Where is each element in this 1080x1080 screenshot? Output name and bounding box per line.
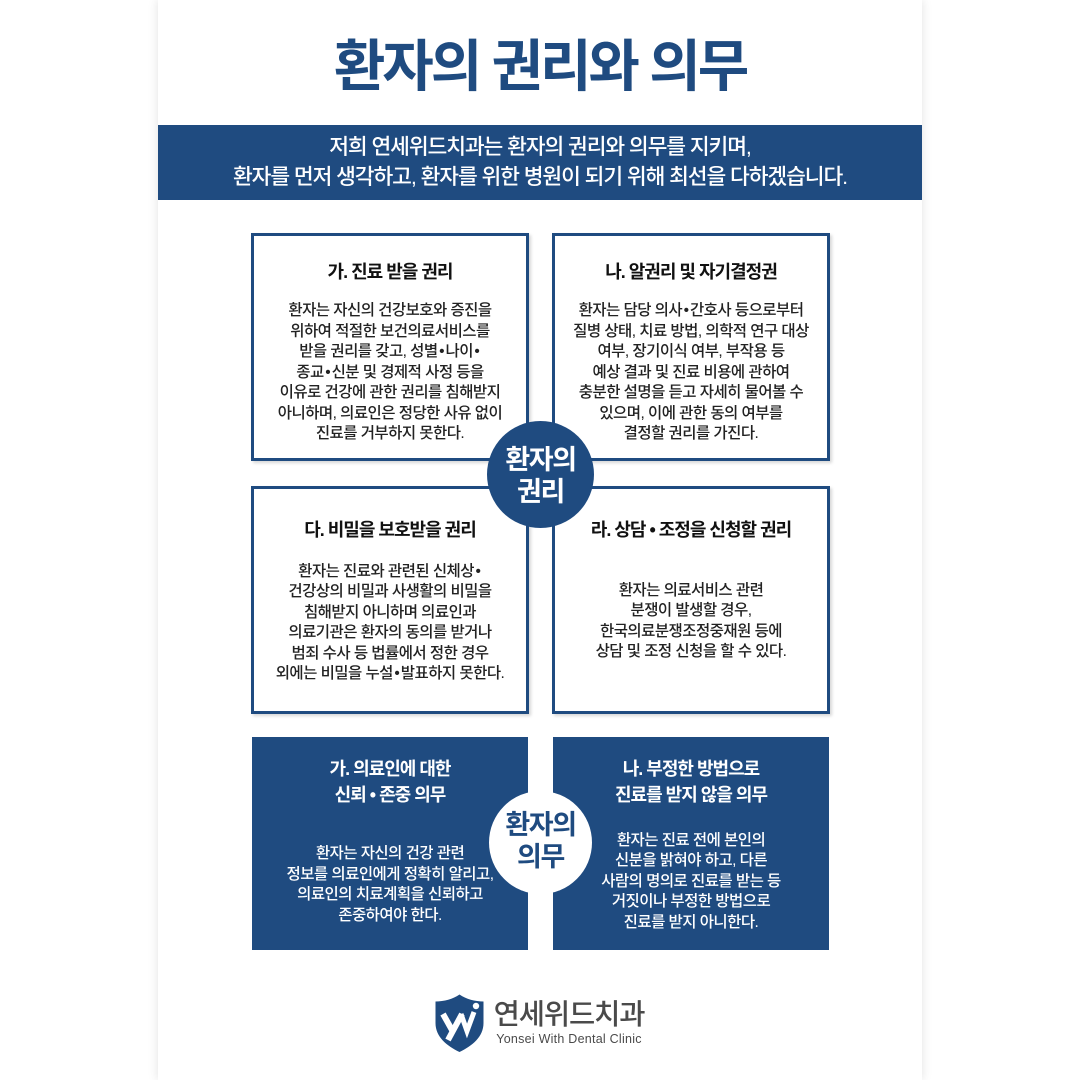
body text: 아니하며, 의료인은 정당한 사유 없이	[278, 404, 502, 422]
body text: 환자는 진료와 관련된 신체상•	[298, 562, 480, 580]
body text: 충분한 설명을 듣고 자세히 물어볼 수	[579, 384, 803, 401]
heading: 진료를 받지 않을 의무	[615, 785, 767, 805]
logo English name: Yonsei With Dental Clinic	[496, 1032, 642, 1046]
panel: right to treatment	[251, 233, 529, 461]
heading	[330, 759, 451, 805]
body text: 이유로 건강에 관한 권리를 침해받지	[280, 384, 500, 401]
body text: 외에는 비밀을 누설•발표하지 못한다.	[276, 665, 504, 682]
badge text: 의무	[517, 842, 564, 872]
badge text: 환자의	[505, 810, 576, 840]
body text: 환자는 자신의 건강보호와 증진을	[288, 302, 492, 319]
panel: duty of trust and respect	[252, 737, 528, 950]
body text: 분쟁이 발생할 경우,	[631, 602, 751, 619]
body text: 진료를 거부하지 못한다.	[316, 425, 464, 442]
body text: 있으며, 이에 관한 동의 여부를	[599, 404, 783, 422]
page sheet	[158, 0, 922, 1080]
body text	[573, 302, 809, 442]
icon: shield	[436, 994, 484, 1052]
body text: 환자는 자신의 건강 관련	[316, 845, 464, 862]
panel: right to know and self-determination	[552, 233, 830, 461]
heading	[615, 759, 768, 805]
body text: 사람의 명의로 진료를 받는 등	[601, 872, 781, 890]
body text: 진료를 받지 아니한다.	[624, 914, 758, 930]
heading: 라. 상담 • 조정을 신청할 권리	[591, 520, 791, 540]
body text	[276, 562, 504, 682]
body text	[601, 832, 781, 930]
body text: 환자는 담당 의사•간호사 등으로부터	[579, 302, 803, 319]
body text: 한국의료분쟁조정중재원 등에	[600, 622, 782, 640]
body text	[278, 302, 502, 442]
intro text: 저희 연세위드치과는 환자의 권리와 의무를 지키며,	[329, 134, 751, 158]
body text	[287, 845, 493, 924]
body text: 신분을 밝혀야 하고, 다른	[615, 852, 767, 869]
heading: 가. 진료 받을 권리	[328, 262, 452, 282]
body text: 종교•신분 및 경제적 사정 등을	[296, 364, 484, 380]
intro text: 환자를 먼저 생각하고, 환자를 위한 병원이 되기 위해 최선을 다하겠습니다.	[233, 165, 847, 189]
body text: 결정할 권리를 가진다.	[624, 425, 758, 442]
body text: 예상 결과 및 진료 비용에 관하여	[592, 364, 790, 380]
body text: 질병 상태, 치료 방법, 의학적 연구 대상	[573, 322, 809, 340]
body text: 침해받지 아니하며 의료인과	[304, 604, 476, 620]
body text: 건강상의 비밀과 사생활의 비밀을	[288, 583, 492, 600]
body text: 환자는 진료 전에 본인의	[617, 832, 765, 848]
body text: 환자는 의료서비스 관련	[619, 582, 763, 598]
panel: right to privacy	[251, 486, 529, 714]
badge: patient rights	[487, 421, 594, 528]
body text: 의료기관은 환자의 동의를 받거나	[288, 624, 492, 641]
intro text	[233, 134, 847, 189]
badge text	[505, 810, 576, 872]
title: 환자의 권리와 의무	[334, 35, 746, 98]
intro banner	[158, 125, 922, 200]
body text: 정보를 의료인에게 정확히 알리고,	[287, 866, 493, 882]
badge: patient duties	[489, 791, 592, 894]
heading: 가. 의료인에 대한	[330, 759, 450, 779]
heading: 신뢰 • 존중 의무	[335, 785, 445, 805]
body text: 위하여 적절한 보건의료서비스를	[290, 322, 490, 340]
badge text: 환자의	[505, 444, 576, 474]
panel: right to counselling and mediation	[552, 486, 830, 714]
body text: 여부, 장기이식 여부, 부작용 등	[597, 343, 785, 360]
body text: 상담 및 조정 신청을 할 수 있다.	[596, 643, 786, 660]
logo	[436, 994, 645, 1052]
body text	[596, 582, 786, 660]
heading: 나. 부정한 방법으로	[623, 759, 759, 779]
badge text	[505, 444, 576, 506]
panel: duty not to receive care improperly	[553, 737, 829, 950]
body text: 존중하여야 한다.	[338, 906, 442, 924]
heading: 다. 비밀을 보호받을 권리	[304, 520, 476, 540]
badge text: 권리	[517, 476, 564, 506]
body text: 거짓이나 부정한 방법으로	[612, 893, 770, 910]
body text: 받을 권리를 갖고, 성별•나이•	[299, 343, 479, 360]
logo wordmark: 연세위드치과	[494, 999, 644, 1031]
body text: 범죄 수사 등 법률에서 정한 경우	[291, 644, 488, 662]
heading: 나. 알권리 및 자기결정권	[605, 262, 777, 282]
body text: 의료인의 치료계획을 신뢰하고	[297, 886, 483, 903]
